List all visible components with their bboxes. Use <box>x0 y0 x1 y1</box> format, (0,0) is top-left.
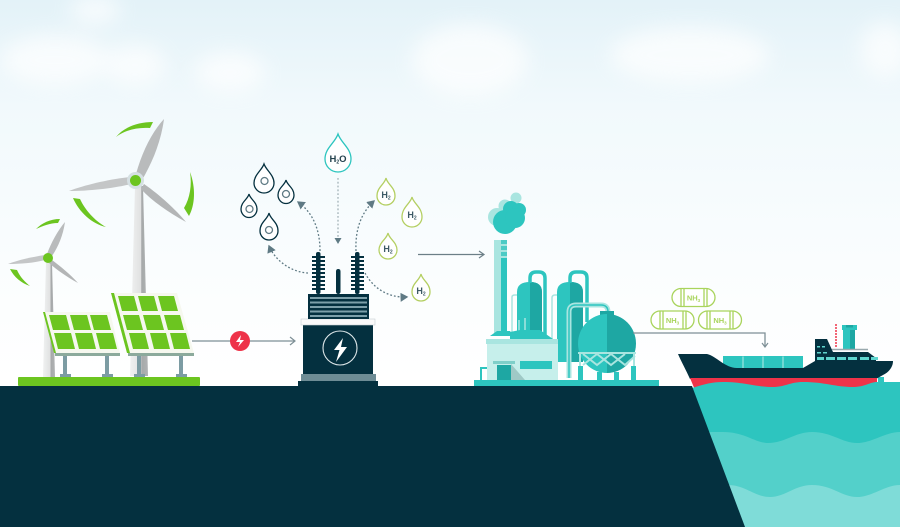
hydrogen drops: 2 <box>390 250 393 256</box>
hydrogen drops: H <box>416 286 423 296</box>
water drop: H2O: O <box>339 154 347 165</box>
ship <box>678 324 893 390</box>
arrow: power to transformer <box>192 340 294 342</box>
NH3 capsules: NH <box>687 294 698 302</box>
NH3 capsules <box>651 288 742 329</box>
NH3 capsules: 3 <box>698 298 701 303</box>
water drop: H2O: 2 <box>336 160 339 166</box>
icon: electricity <box>230 331 250 351</box>
arrow: to ammonia plant <box>418 254 483 256</box>
hydrogen drops: 2 <box>423 292 426 298</box>
hydrogen drops: 2 <box>414 216 417 222</box>
hydrogen drops: H <box>381 190 388 200</box>
water drop: H2O <box>325 134 351 172</box>
NH3 capsules: 3 <box>677 320 680 326</box>
hydrogen drops: H <box>407 210 414 220</box>
small wind turbine <box>8 222 78 377</box>
NH3 capsules: NH <box>713 316 724 325</box>
sea <box>692 382 900 527</box>
ammonia plant <box>474 192 659 386</box>
hydrogen drops: H <box>383 244 390 254</box>
transformer <box>298 252 378 387</box>
green wind swooshes <box>10 122 194 286</box>
dotted arrows <box>269 178 407 297</box>
NH3 capsules: 3 <box>724 320 727 326</box>
oxygen drops <box>241 164 294 240</box>
solar panels <box>18 293 200 386</box>
water drop: H2O: H <box>329 154 336 165</box>
hydrogen drops <box>377 178 430 301</box>
hydrogen drops: 2 <box>388 196 391 202</box>
ground <box>0 386 745 527</box>
large wind turbine <box>69 119 186 376</box>
arrow: ammonia to ship <box>633 333 765 346</box>
NH3 capsules: NH <box>666 316 677 325</box>
